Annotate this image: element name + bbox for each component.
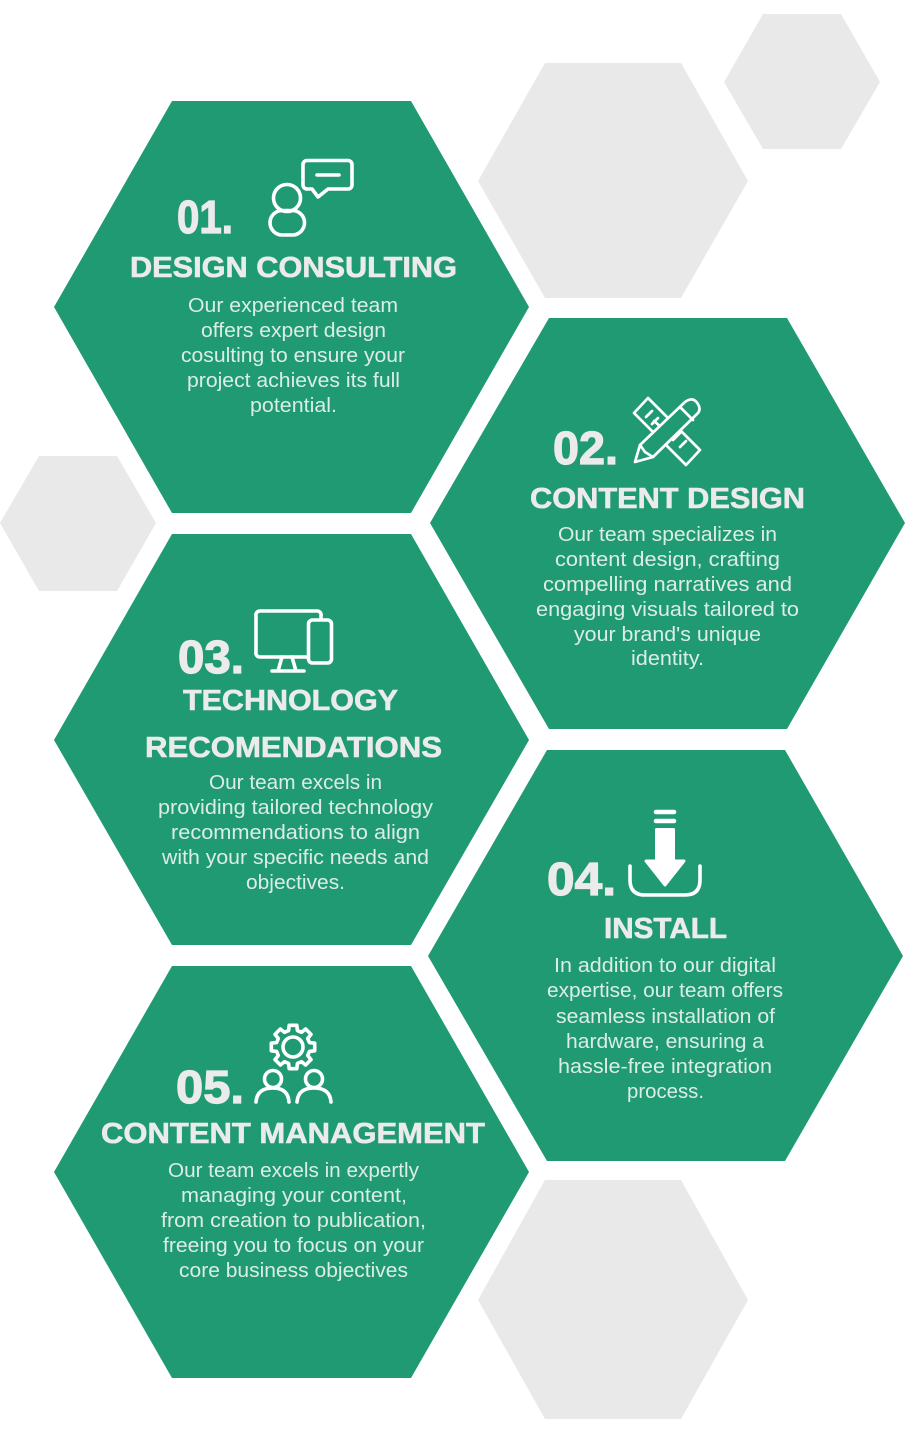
description <box>161 1159 426 1282</box>
description <box>547 954 783 1103</box>
hexagon 01 <box>54 101 529 513</box>
icon: gear and two people <box>256 1025 331 1102</box>
panel: 02 content design <box>430 318 905 729</box>
number 04: 04. <box>547 853 616 905</box>
heading line 2: RECOMENDATIONS <box>145 732 442 764</box>
heading: CONTENT MANAGEMENT <box>101 1118 485 1150</box>
description: cosulting to ensure your <box>181 344 405 367</box>
panel: 05 content management <box>54 966 529 1378</box>
description: objectives. <box>246 871 345 894</box>
hexagon 02 <box>430 318 905 729</box>
description: potential. <box>250 394 337 417</box>
description: Our team excels in <box>209 771 382 794</box>
panel: 01 design consulting <box>54 101 529 513</box>
description: content design, crafting <box>555 548 780 571</box>
hexagon 05 <box>54 966 529 1378</box>
heading: DESIGN CONSULTING <box>130 252 457 284</box>
description: identity. <box>631 647 704 670</box>
description: freeing you to focus on your <box>163 1234 424 1257</box>
hexagon 04 <box>428 750 903 1161</box>
number 05: 05. <box>176 1061 244 1113</box>
description <box>158 771 434 894</box>
description: with your specific needs and <box>161 846 429 869</box>
number 01: 01. <box>177 191 233 243</box>
icon: monitor and phone <box>256 611 332 671</box>
description: Our team excels in expertly <box>168 1159 420 1182</box>
panel: 03 technology recomendations <box>54 534 529 945</box>
icon: download arrow into tray <box>630 812 700 895</box>
description: hassle-free integration <box>558 1055 772 1078</box>
description: expertise, our team offers <box>547 979 783 1002</box>
description: managing your content, <box>181 1184 407 1207</box>
heading: TECHNOLOGY <box>183 685 398 717</box>
description: Our team specializes in <box>558 523 777 546</box>
description: recommendations to align <box>171 821 420 844</box>
description: compelling narratives and <box>543 573 792 596</box>
description: your brand's unique <box>574 623 761 646</box>
panel: 04 install <box>428 750 903 1161</box>
description: seamless installation of <box>556 1005 775 1028</box>
heading: INSTALL <box>604 913 727 945</box>
description <box>181 294 405 417</box>
icon: person with speech bubble <box>270 160 352 235</box>
description: project achieves its full <box>187 369 400 392</box>
description: Our experienced team <box>188 294 398 317</box>
description: engaging visuals tailored to <box>536 598 799 621</box>
description: process. <box>627 1080 704 1103</box>
description: offers expert design <box>201 319 386 342</box>
description: providing tailored technology <box>158 796 434 819</box>
description: In addition to our digital <box>554 954 776 977</box>
number 03: 03. <box>178 631 244 683</box>
heading: CONTENT DESIGN <box>530 483 805 515</box>
description: hardware, ensuring a <box>566 1030 765 1053</box>
description <box>536 523 799 670</box>
description: from creation to publication, <box>161 1209 426 1232</box>
icon: ruler and pencil <box>634 398 700 465</box>
number 02: 02. <box>553 422 618 474</box>
hexagon 03 <box>54 534 529 945</box>
description: core business objectives <box>179 1259 408 1282</box>
